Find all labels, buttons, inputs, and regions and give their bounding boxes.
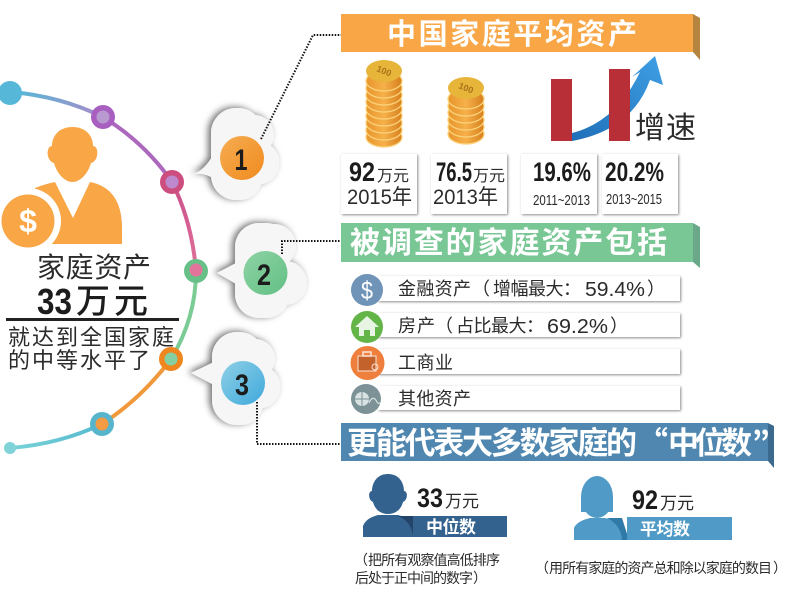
caption: median definition: 后处于正中间的数字 — [355, 570, 473, 586]
list row: financial assets: 59.4% — [585, 279, 645, 301]
caption: median definition: ） — [473, 570, 487, 586]
icon: coin stack 2013: 100 — [457, 81, 475, 95]
list row: financial assets: 增幅最大： — [493, 279, 581, 299]
average figure: 平均数 — [640, 520, 690, 539]
caption: average definition: （ — [535, 560, 549, 576]
median figure: 万元 — [445, 492, 479, 511]
left text: household assets: 的中等水平了 — [8, 348, 150, 373]
list row: financial assets: （ — [472, 279, 490, 299]
caption: median definition: （ — [354, 552, 368, 568]
list row: industry and commerce — [350, 346, 680, 380]
list row: other assets — [351, 384, 680, 414]
list row: other assets: 其他资产 — [398, 389, 471, 409]
list row: industry and commerce: 工商业 — [398, 353, 453, 373]
stat box: 19.6%: 19.6% — [533, 157, 591, 187]
list row: housing: 房产 — [398, 316, 435, 336]
heading banner: median: ” — [752, 418, 770, 463]
dotted connector 3 — [257, 402, 341, 444]
speech bubble 1: 1 — [234, 144, 248, 177]
stat box: 76.5万元 2013年 — [431, 154, 507, 214]
list row: housing — [351, 311, 680, 343]
list row: housing: ） — [610, 316, 628, 336]
median figure: 33 — [417, 483, 443, 513]
stat box: 92万元 2015年 — [341, 154, 417, 214]
list row: financial assets: ） — [647, 279, 665, 299]
heading banner: average assets: 中国家庭平均资产 — [387, 18, 637, 51]
caption: average definition: 用所有家庭的资产总和除以家庭的数目 — [549, 560, 772, 576]
stat box: 92万元 2015年: 2015年 — [347, 186, 412, 209]
average figure: 92 — [632, 485, 658, 515]
caption: median definition — [354, 552, 500, 586]
speech bubble 3: 3 — [235, 369, 249, 402]
stat box: 20.2% — [602, 154, 678, 214]
left text: household assets: 33 — [37, 281, 72, 322]
average figure: 万元 — [660, 494, 694, 513]
icon: person with dollar coin: $ — [19, 203, 37, 239]
heading banner: surveyed assets: 被调查的家庭资产包括 — [350, 227, 667, 260]
stat box: 76.5万元 2013年: 76.5 — [436, 157, 472, 187]
left text: household assets — [6, 252, 179, 373]
stat box: 92万元 2015年: 万元 — [377, 168, 409, 185]
list row: housing: 69.2% — [547, 316, 608, 338]
icon: person with dollar coin — [0, 127, 122, 254]
timeline arc with nodes — [0, 81, 208, 454]
speech bubble 3 — [191, 332, 280, 425]
caption: average definition: ） — [773, 560, 787, 576]
median figure — [363, 474, 507, 537]
left text: household assets: 万元 — [76, 283, 148, 321]
stat box: 20.2%: 2013~2015 — [606, 191, 662, 208]
heading banner: surveyed assets — [341, 223, 700, 268]
heading banner: median — [341, 418, 774, 468]
left text: household assets: 家庭资产 — [37, 252, 151, 283]
heading banner: median: “ — [637, 418, 668, 463]
heading banner: median: 更能代表大多数家庭的 — [347, 426, 637, 461]
dotted connector 2 — [282, 241, 341, 254]
stat box: 19.6% — [521, 154, 597, 214]
speech bubble 2 — [217, 223, 307, 318]
icon: coin stack 2013 — [448, 77, 484, 144]
list row: housing: 占比最大： — [456, 316, 544, 336]
stat box: 76.5万元 2013年: 2013年 — [433, 186, 498, 209]
icon: coin stack 2015 — [366, 60, 402, 147]
list row: housing: （ — [435, 316, 453, 336]
dotted connector 1 — [261, 35, 341, 139]
heading banner: median: 中位数 — [668, 426, 752, 461]
growth chart with arrow — [551, 56, 696, 145]
average figure — [574, 476, 732, 540]
caption: median definition: 把所有观察值高低排序 — [368, 552, 500, 568]
stat box: 76.5万元 2013年: 万元 — [473, 168, 505, 185]
stat box: 20.2%: 20.2% — [605, 157, 664, 187]
speech bubble 1 — [192, 108, 280, 200]
list row: financial assets — [351, 274, 680, 306]
stat box: 19.6%: 2011~2013 — [533, 192, 590, 209]
list row: financial assets: 金融资产 — [398, 279, 471, 299]
median figure: 中位数 — [426, 517, 476, 537]
stat box: 92万元 2015年: 92 — [349, 157, 375, 187]
speech bubble 2: 2 — [257, 259, 271, 292]
growth chart with arrow: 增速 — [635, 112, 696, 145]
icon: coin stack 2015: 100 — [375, 64, 393, 78]
heading banner: average assets — [341, 14, 700, 60]
left text: household assets: 就达到全国家庭 — [8, 325, 174, 350]
list row: financial assets: $ — [361, 277, 373, 305]
